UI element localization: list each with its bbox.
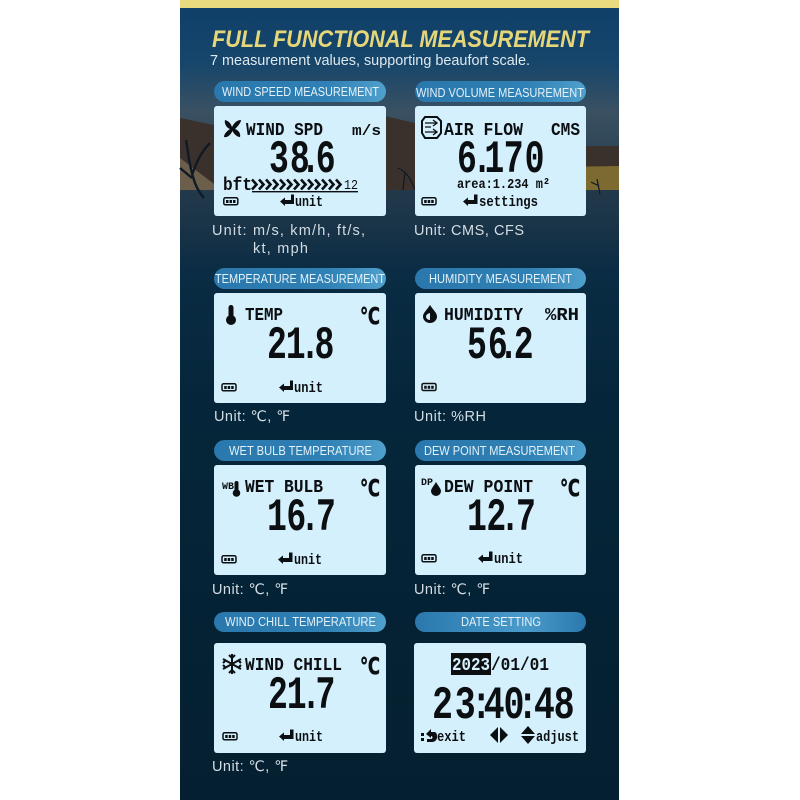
heading pill <box>214 268 386 289</box>
icon: up down arrows <box>521 726 535 744</box>
date: /01/01 <box>491 656 549 676</box>
icon: enter arrow <box>478 552 492 563</box>
unit button: unit <box>295 194 323 211</box>
label: humidity: HUMIDITY <box>444 306 523 326</box>
heading pill: WIND SPEED MEASUREMENT <box>222 85 379 99</box>
exit button: exit <box>437 729 466 746</box>
unit note: Unit: %RH <box>414 409 486 425</box>
value: 56.2 <box>467 321 534 373</box>
unit button: unit <box>294 380 323 397</box>
panel: humidity <box>414 268 586 425</box>
unit note <box>212 223 365 257</box>
heading pill <box>415 612 586 632</box>
unit note: Unit: ℃, ℉ <box>212 759 288 775</box>
icon: enter arrow <box>279 380 293 392</box>
LCD screen <box>415 106 586 216</box>
label: wind chill: WIND CHILL <box>245 656 342 676</box>
title: FULL FUNCTIONAL MEASUREMENT <box>212 26 591 53</box>
LCD screen <box>214 293 386 403</box>
icon: battery <box>222 556 236 563</box>
unit button: unit <box>295 729 323 746</box>
panel: temperature <box>214 268 386 425</box>
settings button: settings <box>479 194 538 211</box>
unit: ℃ <box>360 476 380 502</box>
label: air flow: AIR FLOW <box>444 121 523 141</box>
heading pill <box>214 81 386 102</box>
label: temp: TEMP <box>245 306 283 326</box>
icon: left right arrows <box>490 727 508 743</box>
icon: battery <box>422 555 436 562</box>
subtitle: 7 measurement values, supporting beaufort scale. <box>210 53 530 69</box>
heading pill: HUMIDITY MEASUREMENT <box>429 272 572 286</box>
heading pill: WIND VOLUME MEASUREMENT <box>416 86 584 100</box>
unit button: unit <box>494 551 523 568</box>
icon: air flow <box>422 117 441 138</box>
panel: dew point <box>414 440 586 598</box>
unit note: Unit: ℃, ℉ <box>214 409 290 425</box>
date <box>451 653 549 676</box>
icon: fan <box>224 120 241 137</box>
beaufort scale: bft <box>223 176 252 196</box>
icon: battery <box>422 198 436 205</box>
unit note: Unit: ℃, ℉ <box>212 582 288 598</box>
icon: battery <box>223 733 237 740</box>
unit: m/s <box>352 123 381 140</box>
LCD screen <box>214 465 386 575</box>
label: wind spd: WIND SPD <box>246 121 323 141</box>
time: 23:40:48 <box>432 681 575 733</box>
label: wet bulb: WET BULB <box>245 478 323 498</box>
heading pill <box>214 440 386 461</box>
icon: wet bulb: WB <box>222 482 234 493</box>
unit: ℃ <box>360 304 380 330</box>
adjust button: adjust <box>536 729 579 746</box>
heading pill <box>214 612 386 632</box>
heading pill <box>415 81 586 102</box>
icon: enter arrow <box>279 730 294 741</box>
icon: enter arrow <box>463 194 478 206</box>
heading pill: TEMPERATURE MEASUREMENT <box>215 272 385 286</box>
value: 6.170 <box>457 135 545 187</box>
beaufort scale: 12 <box>344 178 358 194</box>
icon: battery <box>422 384 436 390</box>
panel: date setting <box>414 612 586 753</box>
unit note: Unit: ℃, ℉ <box>414 582 490 598</box>
background panel <box>180 0 619 800</box>
beaufort scale <box>223 176 358 196</box>
LCD screen <box>214 106 386 216</box>
icon: dew point: DP <box>421 478 433 489</box>
panel: wind chill <box>212 612 386 775</box>
unit note: kt, mph <box>253 241 308 257</box>
panel: wind volume <box>414 81 586 239</box>
LCD screen <box>214 643 386 753</box>
value: 16.7 <box>267 493 336 545</box>
date: 2023 <box>452 656 490 676</box>
value: 21.7 <box>268 671 335 723</box>
unit button: unit <box>294 552 322 569</box>
LCD screen <box>415 465 586 575</box>
unit: %RH <box>545 306 579 326</box>
LCD screen <box>415 293 586 403</box>
value: 21.8 <box>267 321 334 373</box>
unit note: Unit: CMS, CFS <box>414 223 524 239</box>
icon: thermometer <box>226 305 236 325</box>
unit note: Unit: m/s, km/h, ft/s, <box>212 223 365 239</box>
icon: enter arrow <box>280 194 294 206</box>
value: 12.7 <box>467 493 536 545</box>
LCD screen <box>414 643 586 753</box>
unit: CMS <box>551 121 580 141</box>
label: dew point: DEW POINT <box>444 478 533 498</box>
icon: wet bulb <box>222 481 240 497</box>
icon: drop <box>423 305 437 323</box>
heading pill <box>415 440 586 461</box>
heading pill <box>415 268 586 289</box>
heading pill: DATE SETTING <box>461 615 541 629</box>
top yellow strip <box>180 0 619 8</box>
icon: battery <box>224 198 238 205</box>
value: 38.6 <box>269 135 336 187</box>
unit: ℃ <box>560 476 580 502</box>
area: area:1.234 m² <box>457 177 550 193</box>
heading pill: DEW POINT MEASUREMENT <box>424 444 575 458</box>
icon: exit <box>421 729 437 742</box>
icon: dew point <box>421 478 441 496</box>
icon: snowflake <box>223 654 241 674</box>
icon: battery <box>222 384 236 391</box>
heading pill: WET BULB TEMPERATURE <box>229 444 372 458</box>
panel: wet bulb <box>212 440 386 598</box>
panel: wind speed <box>212 81 386 257</box>
heading pill: WIND CHILL TEMPERATURE <box>225 615 376 629</box>
icon: enter arrow <box>278 552 292 564</box>
unit: ℃ <box>360 654 380 680</box>
